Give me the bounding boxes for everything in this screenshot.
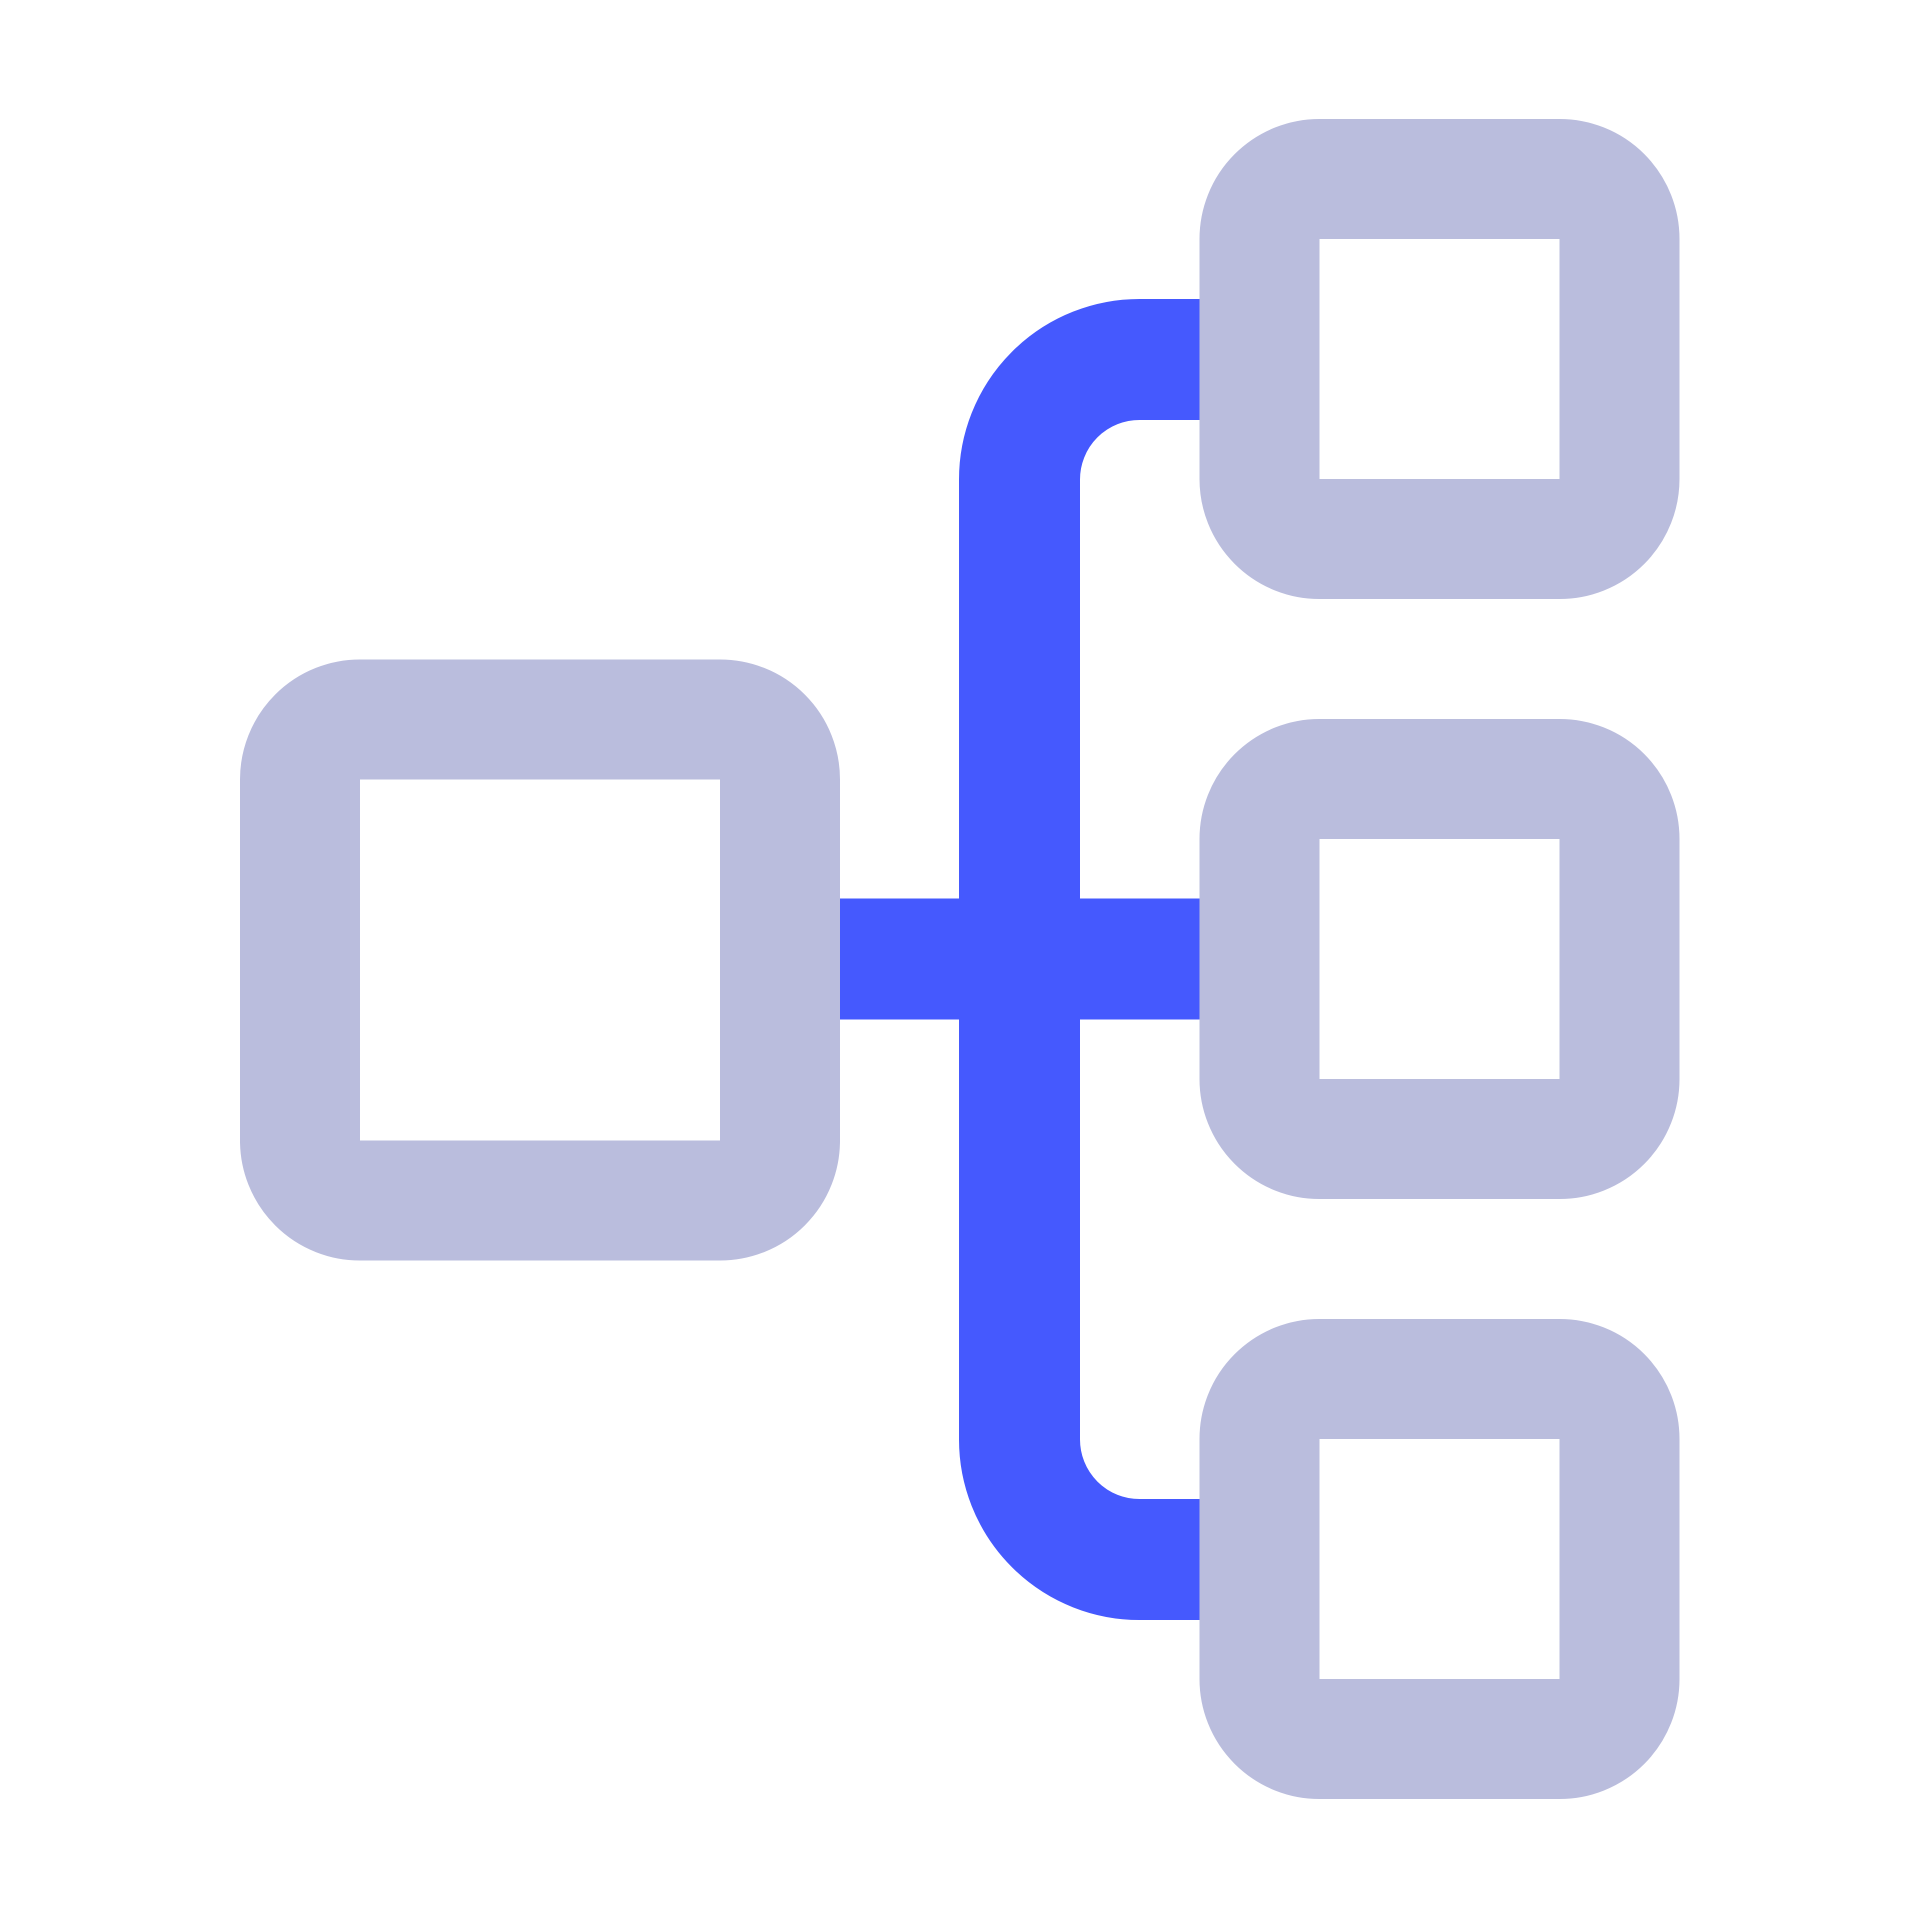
box: middle right child (1260, 779, 1620, 1139)
box: bottom right child (1260, 1379, 1620, 1739)
box: left parent (300, 720, 780, 1200)
box: top right child (1260, 179, 1620, 539)
connector: blue branching lines (830, 360, 1210, 1560)
